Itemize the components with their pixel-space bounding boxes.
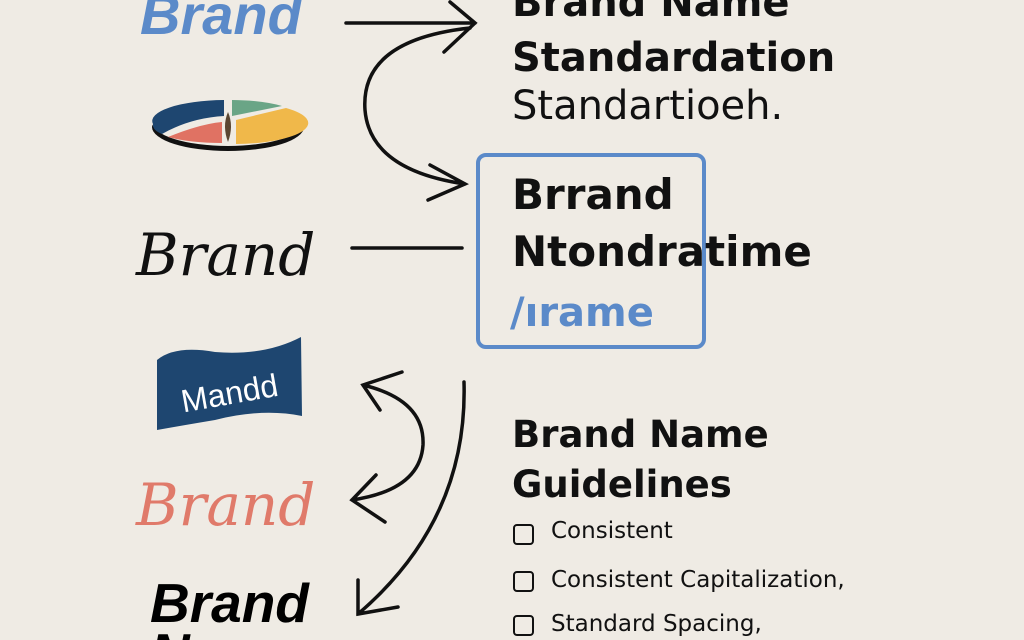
logo: Mandd banner: Mandd	[178, 367, 281, 419]
line: middle connector	[352, 246, 462, 250]
arrow: top straight	[346, 2, 475, 52]
arrow: long downward	[358, 382, 464, 614]
heading: Brand Name Guidelines: Brand Name	[512, 413, 769, 456]
panel: name box	[478, 155, 704, 347]
checklist: Consistent	[551, 518, 673, 544]
logo: coral script Brand: Brand	[135, 471, 315, 539]
box text: Brrand	[512, 170, 674, 219]
arrow: S curve	[365, 28, 470, 200]
heading: Brand Name Standardation: Standardation	[512, 35, 835, 81]
logo: Mandd banner	[157, 337, 302, 430]
arrow: double curve	[352, 372, 423, 522]
logo: black script Brand: Brand	[135, 221, 315, 289]
heading: Brand Name Standardation	[512, 0, 835, 81]
heading: Brand Name Guidelines	[512, 413, 769, 506]
text: Standard Spacing,	[551, 611, 762, 637]
logo: bold black Brand Name: Brand	[150, 572, 310, 634]
heading: Brand Name Guidelines: Guidelines	[512, 463, 732, 506]
box text	[512, 170, 812, 276]
logo: colored ellipse	[152, 98, 308, 151]
text: Consistent Capitalization,	[551, 567, 845, 593]
box text: Ntondratime	[512, 227, 812, 276]
checkboxes	[514, 525, 533, 635]
box text: blue: /ırame	[510, 290, 654, 336]
text: Standartioeh.: Standartioeh.	[512, 83, 783, 129]
